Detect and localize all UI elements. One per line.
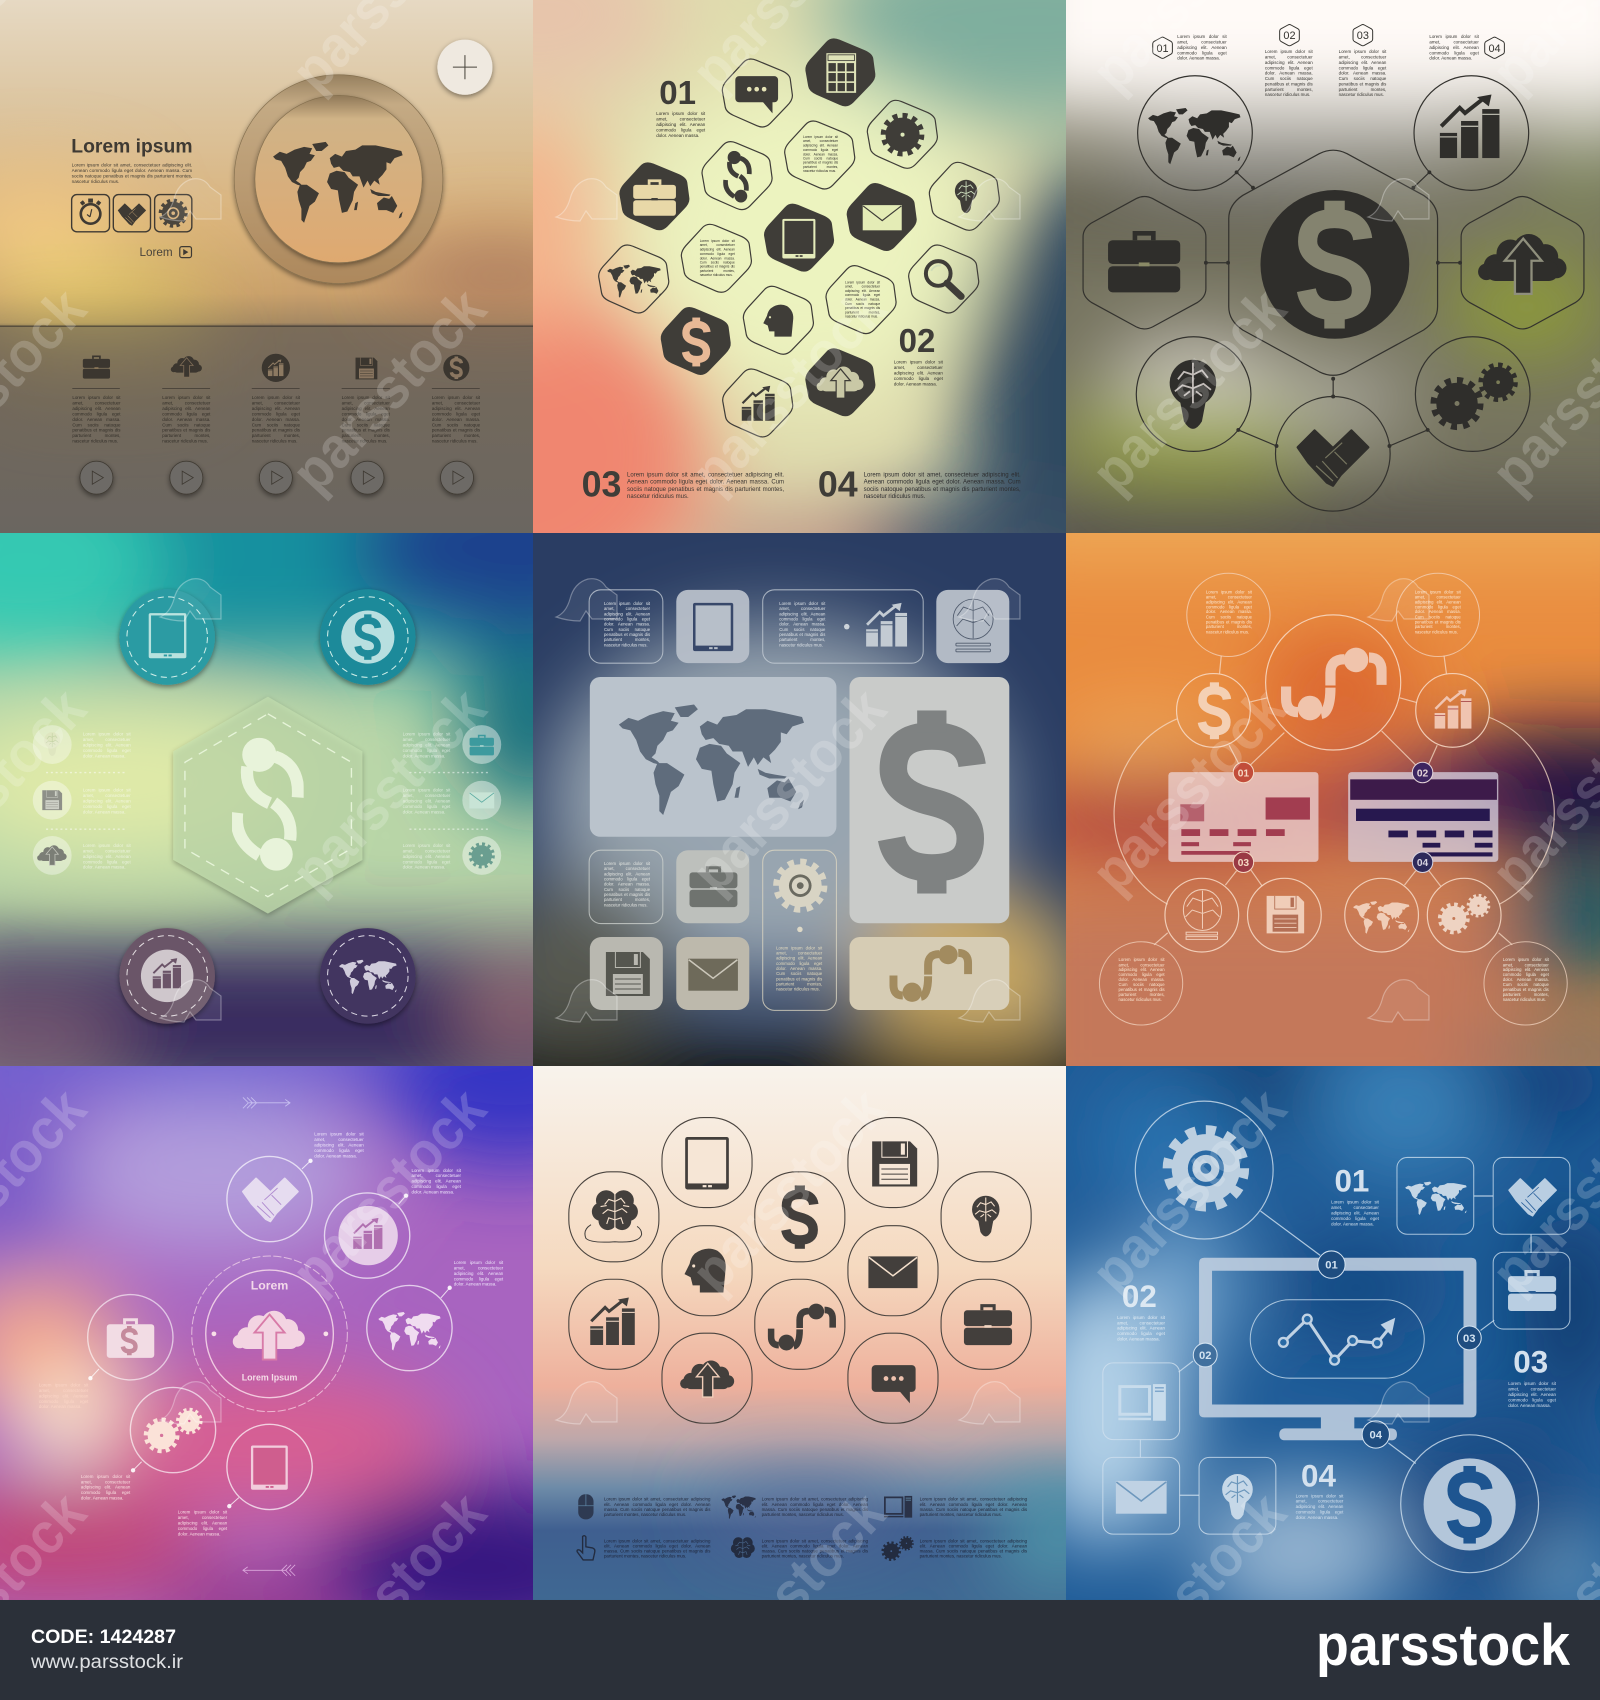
left icon list: Lorem ipsum dolor sit amet, consectetuer adipiscing elit. Aenean commodo ligula eget dolor. Aenean massa. [83,732,131,758]
icon: floppy [872,1141,917,1186]
legend: mouse [578,1494,710,1519]
badge 01 with text: Lorem ipsum dolor sit amet, consectetuer adipiscing elit. Aenean commodo ligula eget dolor. Aenean massa. [1177,34,1227,61]
icon: head [684,1249,726,1293]
column 1: Lorem ipsum dolor sit amet, consectetuer adipiscing elit. Aenean commodo ligula eget dolor. Aenean massa. Cum sociis natoque penatibus et magnis dis parturient montes, nascetur ridiculus mus. [72,395,121,444]
icon: mail [868,1256,918,1288]
number 01 with text: 01 [1334,1164,1369,1199]
footer bar [0,1600,1600,1700]
panel: tile grid [430,533,1187,1153]
panel: hexagon honeycomb [533,0,1066,533]
callout text blocks [39,1132,503,1539]
callout text blocks: Lorem ipsum dolor sit amet, consectetuer adipiscing elit. Aenean commodo ligula eget dolor. Aenean massa. [314,1132,364,1158]
background: pastel blur [533,0,1066,533]
gear circle [1135,1101,1273,1239]
map circle [367,1285,452,1371]
gears circle [130,1387,216,1473]
world map circle [1138,76,1252,190]
number 03 with text: 03 [582,465,621,505]
central cloud badge: Lorem Ipsum [242,1373,297,1383]
chart circle [1414,76,1529,190]
watermark layer: parsstock [279,276,499,505]
badge 02 with text [1265,25,1313,105]
computer box [1103,1363,1180,1440]
number 03 with text [1508,1344,1556,1410]
background: teal to purple blur [0,431,676,1110]
central cloud badge [192,1256,347,1412]
central hexagon with dollar coin [1229,150,1438,375]
number badges: 01 [1238,768,1249,779]
badge 01 with text [1153,34,1227,63]
heading: Lorem ipsum [71,137,193,158]
central cloud badge: Lorem [251,1278,288,1292]
background: warm blur [0,0,533,533]
tile: text outline one [589,590,663,663]
hex: text three [826,266,896,334]
icon: brain [585,1190,642,1242]
text circles [1099,573,1567,1025]
number badges: 04 [1417,858,1429,869]
text circles: Lorem ipsum dolor sit amet, consectetuer adipiscing elit. Aenean commodo ligula eget dolor. Aenean massa. Cum sociis natoque penatibus et magnis dis parturient montes, nascetur ridiculus mus. [1119,957,1165,1002]
badge 02 with text: 02 [1283,30,1296,42]
brain bulb circle [1136,337,1251,451]
card front [1168,772,1318,862]
left icon list: Lorem ipsum dolor sit amet, consectetuer adipiscing elit. Aenean commodo ligula eget dolor. Aenean massa. [83,843,131,870]
tile: text outline two: Lorem ipsum dolor sit amet, consectetuer adipiscing elit. Aenean commodo ligula eget dolor. Aenean massa. Cum sociis natoque penatibus et magnis dis parturient montes, nascetur ridiculus mus. [604,861,650,907]
watermark layer: parsstock [679,276,899,505]
hex: text two [681,224,751,292]
right icon list [403,725,501,875]
callout text blocks: Lorem ipsum dolor sit amet, consectetuer adipiscing elit. Aenean commodo ligula eget dolor. Aenean massa. [454,1260,503,1287]
tile: tablet [676,590,749,663]
text 02: Lorem ipsum dolor sit amet, consectetuer adipiscing elit. Aenean commodo ligula eget dolor. Aenean massa. [894,359,943,386]
badge 04 with text: Lorem ipsum dolor sit amet, consectetuer adipiscing elit. Aenean commodo ligula eget dolor. Aenean massa. [1429,34,1479,61]
icon: cloud [680,1360,734,1397]
briefcase box [1493,1252,1570,1329]
tile: brain [936,590,1009,663]
badge 03 with text: Lorem ipsum dolor sit amet, consectetuer adipiscing elit. Aenean commodo ligula eget dolor. Aenean massa. Cum sociis natoque penatibus et magnis dis parturient montes, nascetur ridiculus mus. [1339,49,1386,97]
number 04 with text: Lorem ipsum dolor sit amet, consectetuer adipiscing elit. Aenean commodo ligula eget dolor. Aenean massa. Cum sociis natoque penatibus et magnis dis parturient montes, nascetur ridiculus mus. [864,471,1021,499]
callout text blocks: Lorem ipsum dolor sit amet, consectetuer adipiscing elit. Aenean commodo ligula eget dolor. Aenean massa. [81,1474,130,1501]
badge 04 with text [1429,34,1504,63]
map box [1397,1157,1474,1234]
hex: mail [847,183,917,251]
tile: text and chart outline [763,590,923,663]
connectors [1140,1196,1531,1495]
number 04 with text: Lorem ipsum dolor sit amet, consectetuer adipiscing elit. Aenean commodo ligula eget dolor. Aenean massa. [1296,1493,1343,1520]
left icon list [33,725,131,875]
number 04 with text: 04 [818,465,858,505]
number badges: 02 [1417,768,1429,779]
legend: map [721,1495,868,1519]
dollar circle [1177,674,1250,747]
gears circle [1415,337,1530,451]
stitched badge: map [320,928,416,1024]
number 02 with text: Lorem ipsum dolor sit amet, consectetuer adipiscing elit. Aenean commodo ligula eget dolor. Aenean massa. [1117,1315,1165,1342]
tile: dollar [850,677,1009,923]
number 02: 02 [899,323,935,360]
stitched badge: dollar [320,589,416,685]
tile: mail [676,937,749,1010]
legend: mouse: Lorem ipsum dolor sit amet, consectetuer adipiscing elit. Aenean commodo ligula eget dolor. Aenean massa. Cum sociis natoque penatibus et magnis dis parturient montes, nascetur ridiculus mus. [604,1497,710,1517]
hex: briefcase [619,162,689,230]
footer bar: www.parsstock.ir [30,1652,184,1673]
central hexagon [173,697,362,913]
panel: world map card with five columns [0,0,533,533]
badge 02 with text: Lorem ipsum dolor sit amet, consectetuer adipiscing elit. Aenean commodo ligula eget dolor. Aenean massa. Cum sociis natoque penatibus et magnis dis parturient montes, nascetur ridiculus mus. [1265,49,1313,97]
tile: gear and text [763,850,836,1010]
background: cream to blue [533,1066,1127,1600]
briefcase hexagon [1083,197,1206,329]
number 04 with text [818,465,1021,505]
column 5 [432,355,480,494]
tile: world map [590,677,836,837]
card back [1348,772,1498,862]
watermark layer: parsstock [1079,676,1299,905]
panel: dollar hexagon network [998,0,1600,601]
column 3: Lorem ipsum dolor sit amet, consectetuer adipiscing elit. Aenean commodo ligula eget dolor. Aenean massa. Cum sociis natoque penatibus et magnis dis parturient montes, nascetur ridiculus mus. [252,395,300,444]
cloud hexagon [1461,197,1584,329]
hex: speech bubble [722,59,792,127]
dollar coin circle [1401,1435,1539,1573]
number 04 with text [1296,1458,1343,1522]
hex: dollar [661,307,731,375]
arrow: bottom [243,1565,295,1576]
background: orange and navy blur [984,431,1600,1144]
right icon list: Lorem ipsum dolor sit amet, consectetuer adipiscing elit. Aenean commodo ligula eget dolor. Aenean massa. [403,843,450,870]
tile: briefcase [676,850,749,923]
panel: monitor network [1022,1039,1600,1622]
number badges: 01 [1325,1260,1338,1272]
legend: brain: Lorem ipsum dolor sit amet, consectetuer adipiscing elit. Aenean commodo ligula eget dolor. Aenean massa. Cum sociis natoque penatibus et magnis dis parturient montes, nascetur ridiculus mus. [762,1538,868,1559]
watermark layer: parsstock [1079,1076,1299,1305]
callout text blocks: Lorem ipsum dolor sit amet, consectetuer adipiscing elit. Aenean commodo ligula eget dolor. Aenean massa. [178,1510,227,1536]
footer bar: CODE: 1424287 [31,1627,176,1648]
panel: teal hexagon with stitched badges [0,431,676,1110]
divider line [0,326,533,327]
handshake circle [1275,396,1390,511]
right icon list: Lorem ipsum dolor sit amet, consectetuer adipiscing elit. Aenean commodo ligula eget dolor. Aenean massa. [403,732,450,758]
column 4: Lorem ipsum dolor sit amet, consectetuer adipiscing elit. Aenean commodo ligula eget dolor. Aenean massa. Cum sociis natoque penatibus et magnis dis parturient montes, nascetur ridiculus mus. [342,395,390,444]
watermark layer: parsstock [279,676,499,905]
column 4 [342,358,390,494]
hex: people link [702,142,772,210]
column 5: Lorem ipsum dolor sit amet, consectetuer adipiscing elit. Aenean commodo ligula eget dolor. Aenean massa. Cum sociis natoque penatibus et magnis dis parturient montes, nascetur ridiculus mus. [432,395,480,444]
hex: world map [599,245,669,313]
hex: text three: Lorem ipsum dolor sit amet, consectetuer adipiscing elit. Aenean commodo ligula eget dolor. Aenean massa. Cum sociis natoque penatibus et magnis dis parturient montes, nascetur ridiculus mus. [845,280,880,318]
floppy circle [1248,878,1321,952]
chart circle [324,1193,410,1278]
stitched badge: tablet [119,589,215,685]
text circles: Lorem ipsum dolor sit amet, consectetuer adipiscing elit. Aenean commodo ligula eget dolor. Aenean massa. Cum sociis natoque penatibus et magnis dis parturient montes, nascetur ridiculus mus. [1503,957,1549,1002]
panel: purple cloud orbit [0,964,648,1653]
text 01: Lorem ipsum dolor sit amet, consectetuer adipiscing elit. Aenean commodo ligula eget dolor. Aenean massa. [656,111,705,138]
lorem link [139,246,191,259]
tablet circle [227,1424,312,1510]
number badges: 02 [1199,1350,1211,1362]
number 03 with text [582,465,784,505]
bulb box [1199,1457,1276,1534]
hex: text one [785,121,855,189]
monitor [1199,1258,1476,1440]
hex: text one: Lorem ipsum dolor sit amet, consectetuer adipiscing elit. Aenean commodo ligula eget dolor. Aenean massa. Cum sociis natoque penatibus et magnis dis parturient montes, nascetur ridiculus mus. [803,135,838,173]
nested circle with world map [234,75,443,283]
icon: tablet [685,1137,729,1189]
hex: text two: Lorem ipsum dolor sit amet, consectetuer adipiscing elit. Aenean commodo ligula eget dolor. Aenean massa. Cum sociis natoque penatibus et magnis dis parturient montes, nascetur ridiculus mus. [700,239,735,277]
watermark layer: parsstock [679,1076,899,1305]
intro text: Lorem ipsum dolor sit amet, consectetuer adipiscing elit. Aenean commodo ligula eget dolor. Aenean massa. Cum sociis natoque penatibus et magnis dis parturient montes, nascetur ridiculus mus. [72,163,192,184]
icon: speech bubble [872,1365,916,1403]
column 2 [162,356,210,494]
chart circle [1416,674,1489,747]
tile: people [850,937,1009,1010]
legend: map: Lorem ipsum dolor sit amet, consectetuer adipiscing elit. Aenean commodo ligula eget dolor. Aenean massa. Cum sociis natoque penatibus et magnis dis parturient montes, nascetur ridiculus mus. [762,1497,868,1517]
number badges: 03 [1463,1333,1476,1345]
column 1 [72,355,121,494]
squircle outlines [569,1118,1031,1423]
brain circle [1165,878,1239,952]
handshake circle [227,1156,312,1242]
legend: computer: Lorem ipsum dolor sit amet, consectetuer adipiscing elit. Aenean commodo ligula eget dolor. Aenean massa. Cum sociis natoque penatibus et magnis dis parturient montes, nascetur ridiculus mus. [920,1497,1027,1517]
number 01 with text [1331,1164,1379,1228]
stitched badge: chart [119,928,215,1024]
footer bar: parsstock [1316,1613,1571,1678]
number 04 with text: 04 [1301,1458,1336,1493]
text circles: Lorem ipsum dolor sit amet, consectetuer adipiscing elit. Aenean commodo ligula eget dolor. Aenean massa. Cum sociis natoque penatibus et magnis dis parturient montes, nascetur ridiculus mus. [1206,590,1252,634]
right icon list: Lorem ipsum dolor sit amet, consectetuer adipiscing elit. Aenean commodo ligula eget dolor. Aenean massa. [403,788,450,814]
outer arcs and connectors [1114,656,1554,945]
icon: dollar [786,1185,814,1249]
callout connectors [89,1159,451,1508]
tile: text outline one: Lorem ipsum dolor sit amet, consectetuer adipiscing elit. Aenean commodo ligula eget dolor. Aenean massa. Cum sociis natoque penatibus et magnis dis parturient montes, nascetur ridiculus mus. [604,601,650,647]
tile: floppy [590,937,663,1010]
legend: gears: Lorem ipsum dolor sit amet, consectetuer adipiscing elit. Aenean commodo ligula eget dolor. Aenean massa. Cum sociis natoque penatibus et magnis dis parturient montes, nascetur ridiculus mus. [920,1538,1027,1559]
background: white and olive blur [998,0,1600,601]
number badges: 03 [1238,858,1249,869]
background: navy and gold blur [430,533,1187,1153]
number 02 with text [1117,1279,1165,1344]
badge 03 with text [1339,25,1386,105]
watermark layer: parsstock [679,676,899,905]
lorem link: Lorem [139,246,173,259]
hex: head [743,286,813,354]
number 03 with text: 03 [1513,1344,1548,1379]
tile: text and chart outline: Lorem ipsum dolor sit amet, consectetuer adipiscing elit. Aenean commodo ligula eget dolor. Aenean massa. Cum sociis natoque penatibus et magnis dis parturient montes, nascetur ridiculus mus. [779,601,825,647]
number 03 with text: Lorem ipsum dolor sit amet, consectetuer adipiscing elit. Aenean commodo ligula eget dolor. Aenean massa. Cum sociis natoque penatibus et magnis dis parturient montes, nascetur ridiculus mus. [627,471,784,499]
hex: tablet [764,204,834,272]
column 3 [252,354,300,494]
panel: credit cards network [984,431,1600,1144]
mail box [1103,1457,1180,1534]
central people circle [1266,615,1401,750]
arrow: top [243,1097,290,1108]
hex: gear [867,100,937,168]
hex: magnifier [909,245,979,313]
handshake box [1493,1157,1570,1234]
map circle [1345,878,1418,952]
background: violet and pink blur [0,964,648,1653]
badge 03 with text: 03 [1357,30,1369,42]
number 02 with text: 02 [1122,1279,1157,1314]
watermark layer: parsstock [1079,276,1299,505]
hex: chart [723,369,793,437]
left icon list: Lorem ipsum dolor sit amet, consectetuer adipiscing elit. Aenean commodo ligula eget dolor. Aenean massa. [83,788,131,814]
text circles: Lorem ipsum dolor sit amet, consectetuer adipiscing elit. Aenean commodo ligula eget dolor. Aenean massa. Cum sociis natoque penatibus et magnis dis parturient montes, nascetur ridiculus mus. [1415,590,1461,634]
legend: pointer: Lorem ipsum dolor sit amet, consectetuer adipiscing elit. Aenean commodo ligula eget dolor. Aenean massa. Cum sociis natoque penatibus et magnis dis parturient montes, nascetur ridiculus mus. [604,1538,710,1559]
icon row [72,195,192,232]
icon: people [771,1304,833,1350]
badge 04 with text: 04 [1488,43,1501,55]
number 01 with text: Lorem ipsum dolor sit amet, consectetuer adipiscing elit. Aenean commodo ligula eget dolor. Aenean massa. [1331,1199,1379,1226]
column 2: Lorem ipsum dolor sit amet, consectetuer adipiscing elit. Aenean commodo ligula eget dolor. Aenean massa. Cum sociis natoque penatibus et magnis dis parturient montes, nascetur ridiculus mus. [162,395,210,444]
tile: gear and text: Lorem ipsum dolor sit amet, consectetuer adipiscing elit. Aenean commodo ligula eget dolor. Aenean massa. Cum sociis natoque penatibus et magnis dis parturient montes, nascetur ridiculus mus. [776,946,822,992]
number badges: 04 [1370,1430,1383,1442]
badge 01 with text: 01 [1156,43,1169,55]
number 01: 01 [659,75,696,112]
hex: cloud [805,348,875,416]
line chart [1279,1315,1395,1365]
money bag circle [88,1295,173,1380]
callout text blocks: Lorem ipsum dolor sit amet, consectetuer adipiscing elit. Aenean commodo ligula eget dolor. Aenean massa. [39,1382,88,1409]
gears circle [1427,878,1501,952]
number badges [1193,1251,1481,1448]
hex: calculator [805,38,875,106]
icon: briefcase [964,1304,1012,1345]
hex: bulb [929,162,999,230]
callout text blocks: Lorem ipsum dolor sit amet, consectetuer adipiscing elit. Aenean commodo ligula eget dolor. Aenean massa. [411,1168,461,1195]
legend: pointer [577,1536,710,1560]
tile: text outline two [589,850,663,924]
plus button [437,40,492,95]
panel: squircle icon grid [533,1066,1127,1600]
number badges [1233,762,1433,872]
background: blue blur [1022,1039,1600,1622]
number 03 with text: Lorem ipsum dolor sit amet, consectetuer adipiscing elit. Aenean commodo ligula eget dolor. Aenean massa. [1508,1381,1556,1408]
watermark layer: parsstock [279,1076,499,1305]
icon: chart [590,1298,635,1345]
connectors [1205,171,1461,447]
legend: gears [883,1537,1027,1559]
icon: bulb [972,1196,1000,1236]
